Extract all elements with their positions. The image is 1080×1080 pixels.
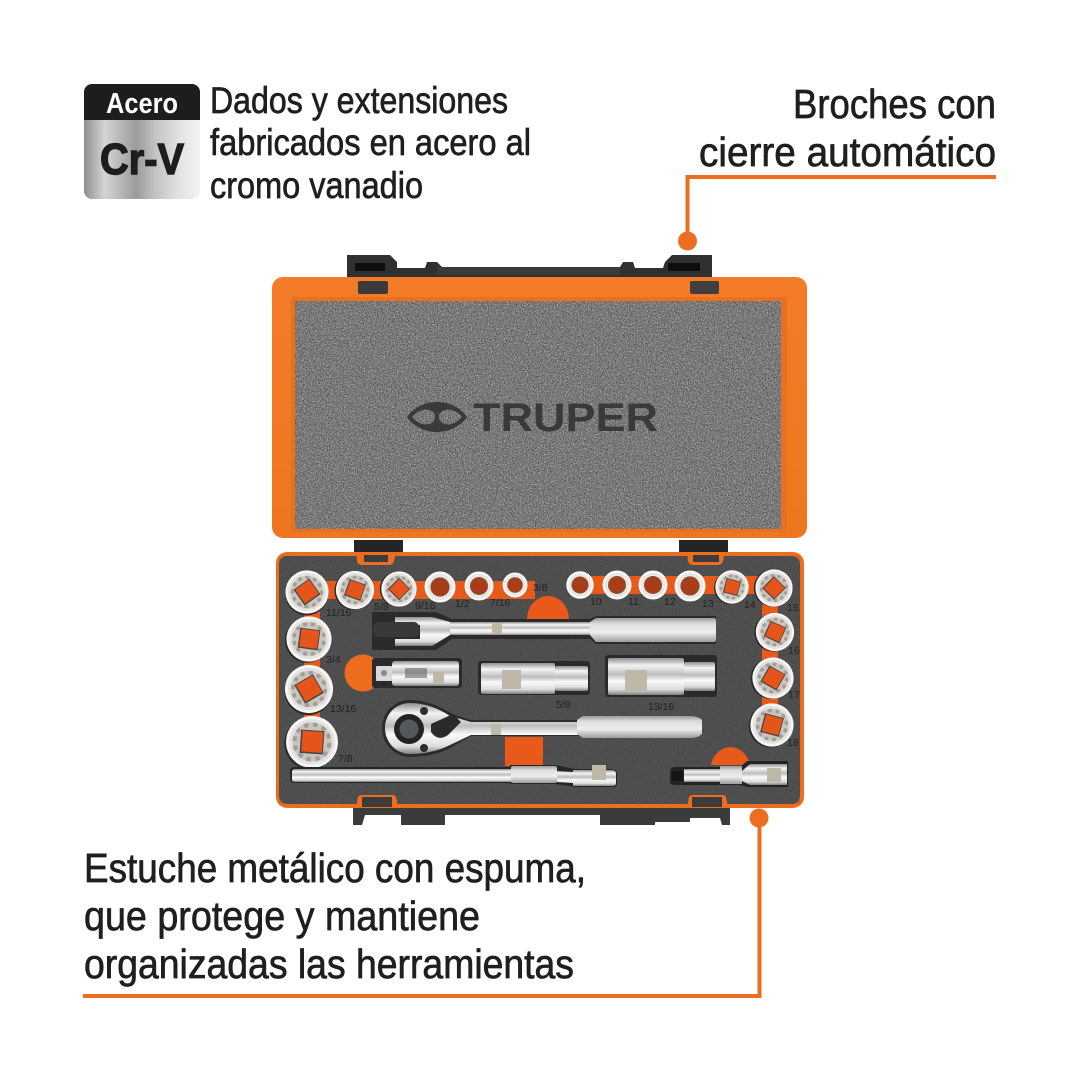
panel: case base bbox=[276, 540, 804, 825]
logo mark bbox=[407, 402, 467, 432]
heading: automatic clasps: Broches con bbox=[793, 81, 996, 127]
heading: automatic clasps: cierre automático bbox=[699, 129, 996, 175]
size labels: 15 bbox=[787, 602, 799, 614]
base orange frame bbox=[276, 552, 804, 808]
sockets top row, left set bbox=[277, 564, 526, 624]
size labels: 13 bbox=[702, 598, 714, 610]
callout line: clasps bbox=[678, 177, 996, 250]
tool: ratchet bbox=[382, 700, 702, 757]
size labels: 7/16 bbox=[490, 597, 511, 609]
text block: foam case description: Estuche metálico con espuma, bbox=[84, 845, 586, 891]
text block: material description bbox=[210, 80, 531, 206]
tool: 13/16 extension socket bbox=[605, 655, 717, 697]
size labels: 11/16 bbox=[326, 607, 352, 619]
panel: case lid bbox=[272, 255, 807, 538]
logo: Truper bbox=[407, 396, 658, 440]
size labels: 12 bbox=[664, 596, 676, 608]
size labels: 13/16 bbox=[330, 703, 356, 715]
lid clip slots bbox=[358, 281, 719, 294]
size labels: 13/16 bbox=[648, 701, 674, 713]
size labels: 18 bbox=[787, 737, 799, 749]
size labels bbox=[326, 582, 800, 765]
size labels: 1/2 bbox=[455, 598, 470, 610]
icon: Acero Cr-V badge: Cr-V bbox=[100, 135, 185, 184]
size labels: 5/8 bbox=[374, 601, 389, 613]
icon: Acero Cr-V badge: Acero bbox=[106, 88, 178, 120]
size labels: 17 bbox=[788, 689, 800, 701]
wordmark: TRUPER bbox=[473, 396, 658, 440]
text block: material description: cromo vanadio bbox=[210, 165, 423, 206]
tool: 5/8 extension socket bbox=[478, 661, 590, 695]
icon: Acero Cr-V badge bbox=[84, 84, 200, 199]
callout line: foam case bbox=[83, 808, 768, 996]
sockets top row, right set bbox=[566, 562, 799, 614]
size labels: 3/4 bbox=[326, 654, 341, 666]
size labels: 16 bbox=[788, 645, 800, 657]
lid inner edge bbox=[291, 297, 787, 532]
size labels: 3/8 bbox=[533, 582, 548, 594]
foam panel bbox=[295, 301, 781, 529]
text block: material description: Dados y extensiones bbox=[210, 80, 508, 121]
tool: flex-head ratchet handle bbox=[372, 612, 716, 650]
sockets left column bbox=[276, 615, 341, 771]
text block: foam case description bbox=[84, 845, 586, 987]
hinge bar bottom bbox=[353, 808, 730, 825]
heading: automatic clasps bbox=[699, 81, 996, 175]
foam insert bbox=[279, 556, 800, 804]
text block: foam case description: organizadas las herramientas bbox=[84, 941, 574, 987]
tool: long extension bar bbox=[290, 765, 617, 787]
size labels: 14 bbox=[744, 599, 756, 611]
base clasps bottom bbox=[356, 795, 728, 807]
text block: material description: fabricados en acero al bbox=[210, 122, 531, 163]
size labels: 5/8 bbox=[556, 699, 571, 711]
size labels: 11 bbox=[628, 596, 639, 608]
lid hinges bbox=[347, 255, 712, 277]
size labels: 7/8 bbox=[338, 753, 353, 765]
tool: short extension bar bbox=[670, 761, 788, 787]
size labels: 9/16 bbox=[415, 600, 436, 612]
orange cut-outs bbox=[304, 576, 778, 766]
tool: universal joint bbox=[372, 658, 462, 688]
base clasps top bbox=[354, 540, 728, 565]
size labels: 10 bbox=[590, 596, 602, 608]
lid orange frame bbox=[272, 277, 807, 538]
text block: foam case description: que protege y mantiene bbox=[84, 893, 480, 939]
sockets right column bbox=[743, 607, 799, 752]
